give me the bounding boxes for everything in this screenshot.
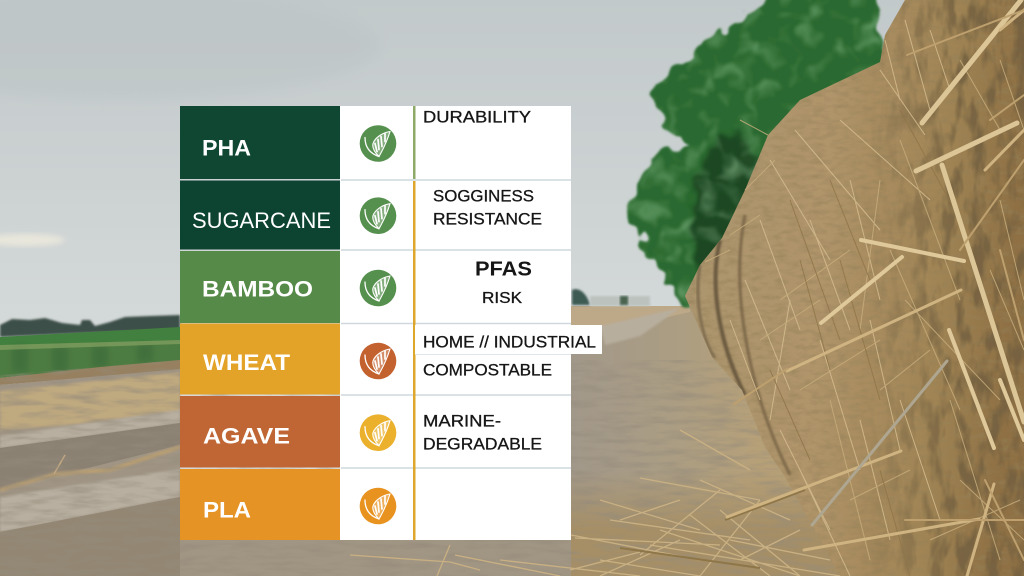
row: BAMBOO label [180,251,340,323]
icon: leaf badge PHA [360,125,396,162]
road behind and below the table [180,540,600,576]
row: PLA label [180,469,340,540]
text: marine-degradable [423,413,542,453]
row: PHA label [180,106,340,179]
text: sogginess resistance: RESISTANCE [433,210,542,228]
row: PHA label: PHA [202,136,251,161]
text: PFAS risk [475,259,532,307]
text: sogginess resistance: SOGGINESS [433,188,534,206]
background photo: hay bale [350,0,1024,576]
text: sogginess resistance [433,188,542,228]
row: AGAVE label: AGAVE [203,424,290,449]
icon: leaf badge bamboo [360,270,396,306]
fine fibres [705,20,1024,576]
large straws [727,0,1024,576]
icon: leaf badge sugarcane [360,197,396,234]
text: durability: DURABILITY [423,109,531,127]
icon: leaf badge PLA [360,488,396,524]
icon: leaf badge agave [360,414,396,451]
row: SUGARCANE label [180,180,340,250]
ground straw [350,430,840,576]
distant tree line [0,315,180,337]
text: home // industrial compostable: HOME // INDUSTRIAL [423,333,596,351]
background photo: trees [625,0,890,310]
text: marine-degradable: DEGRADABLE [423,435,542,453]
row: AGAVE label [180,396,340,468]
panel: white table body [340,106,571,540]
row: WHEAT label [180,324,340,394]
comparison table [180,106,602,540]
text: marine-degradable: MARINE- [423,413,501,431]
text: PFAS risk: RISK [482,290,522,307]
icon: leaf badge wheat [360,343,396,379]
text: home // industrial compostable: COMPOSTABLE [423,361,552,379]
text: PFAS risk: PFAS [475,259,532,281]
row: PLA label: PLA [203,497,251,522]
row: SUGARCANE label: SUGARCANE [192,208,331,233]
column divider [413,106,416,540]
row: WHEAT label: WHEAT [203,350,290,375]
text: home // industrial compostable [415,325,602,379]
row: BAMBOO label: BAMBOO [202,277,313,302]
